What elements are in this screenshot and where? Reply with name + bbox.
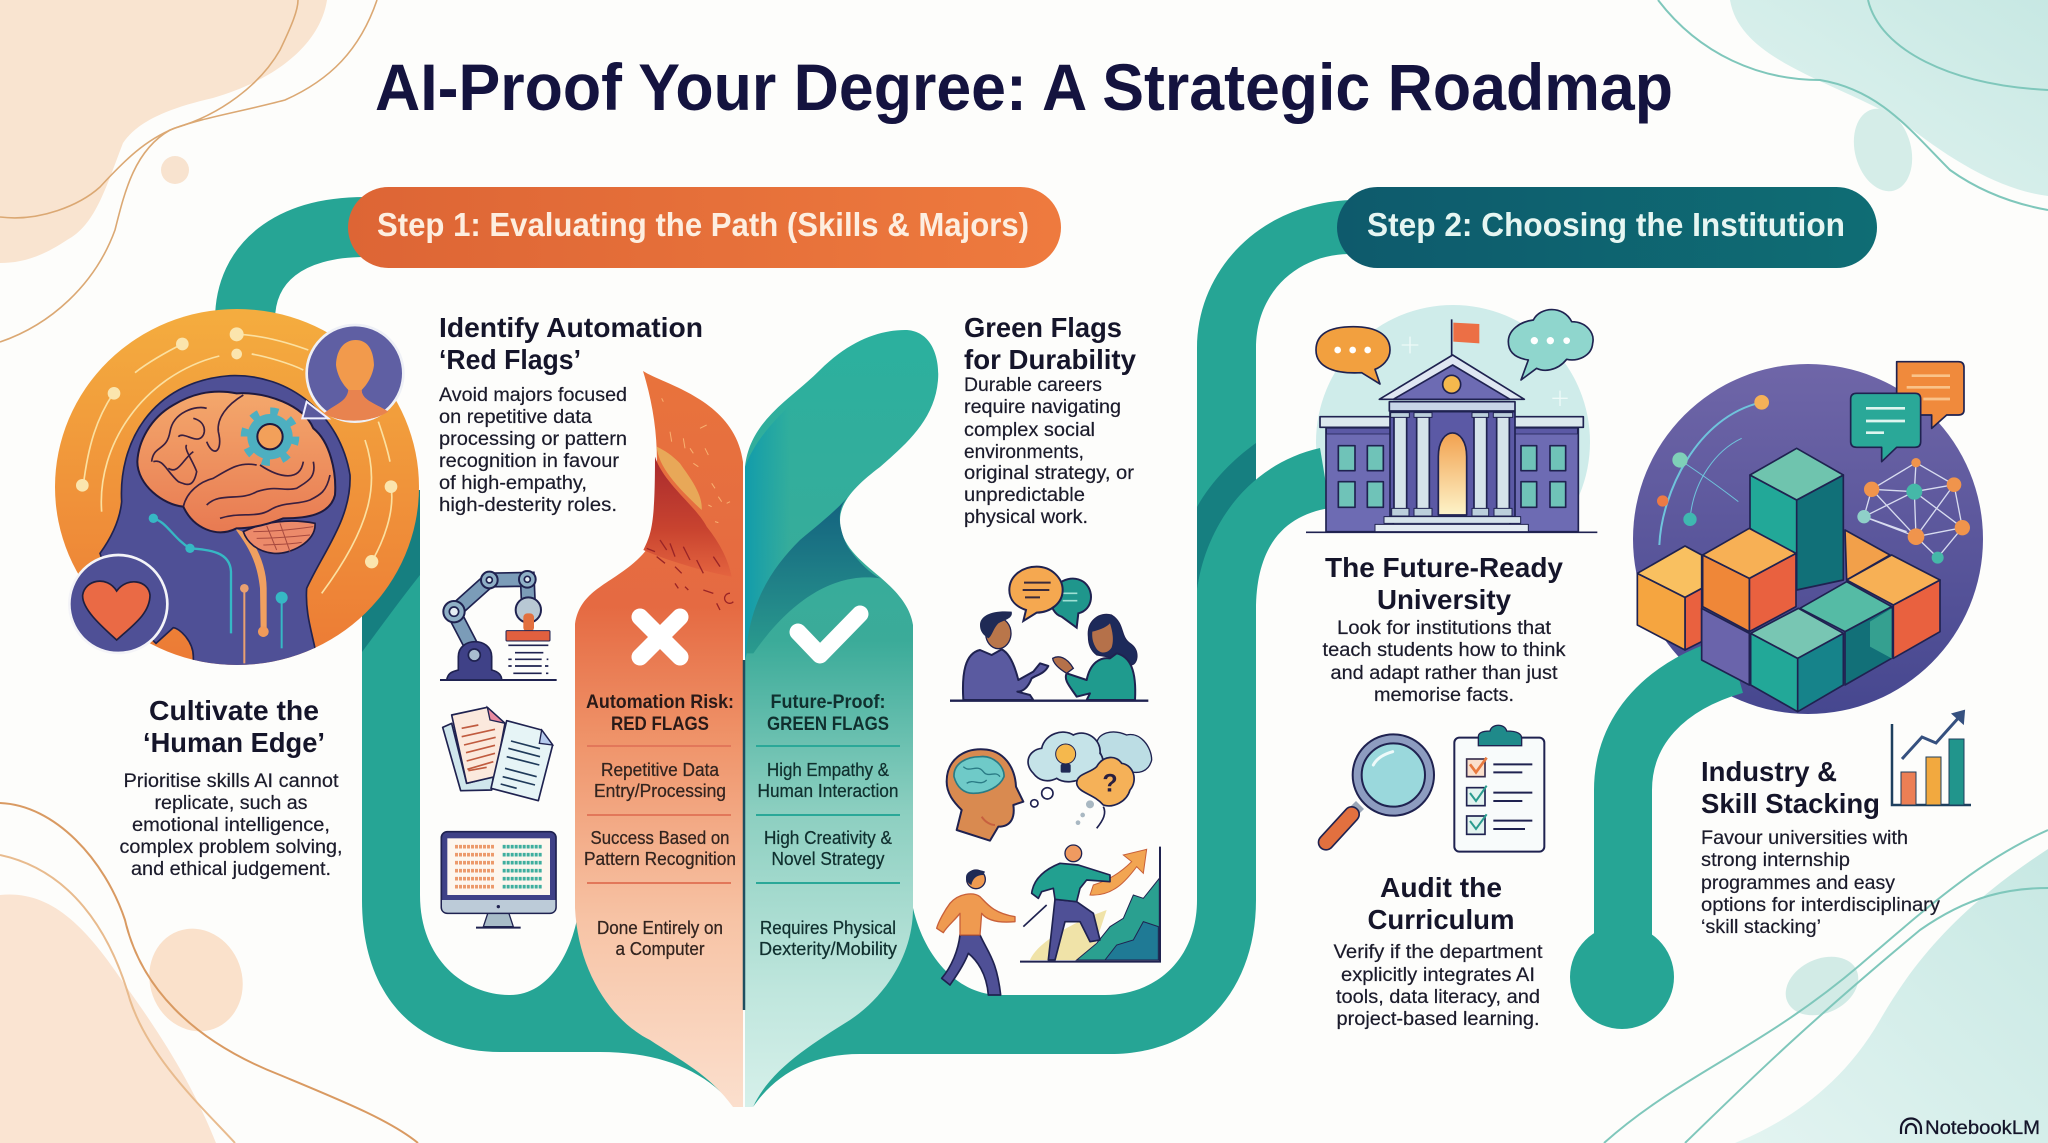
icon: checklist clipboard [1454, 725, 1544, 852]
path ribbon: left loop [362, 490, 735, 1107]
step 1 pill [348, 187, 1061, 268]
text block: the future-ready university: Look for institutions that [1337, 618, 1552, 639]
text block: identify automation red flags: recognition in favour [439, 451, 620, 472]
divider: red and green [743, 660, 745, 1010]
text block: red flags list [584, 692, 736, 959]
path ribbon: stem to skill stacking [1570, 665, 1735, 1029]
title: AI-Proof Your Degree: A Strategic Roadmap [375, 50, 1673, 124]
text block: industry and skill stacking: ‘skill stacking’ [1701, 917, 1821, 938]
text block: green flags for durability [964, 312, 1136, 528]
panel: green flags column [745, 330, 938, 1107]
text block: green flags list: GREEN FLAGS [767, 714, 889, 735]
text block: green flags for durability: environments, [964, 442, 1084, 463]
path ribbon: start into step 1 [245, 227, 365, 320]
text block: green flags for durability: Durable careers [964, 375, 1102, 396]
text block: red flags list: RED FLAGS [611, 714, 709, 735]
text block: cultivate the human edge: Prioritise skills AI cannot [124, 771, 339, 792]
icon: two people talking [950, 567, 1148, 701]
text block: red flags list: Automation Risk: [586, 692, 734, 713]
watermark: NotebookLM: NotebookLM [1925, 1118, 2040, 1139]
text block: green flags list: Requires Physical [760, 918, 896, 938]
icon: magnifying glass [1326, 734, 1434, 842]
panel: red flags column [575, 371, 743, 1107]
text block: audit the curriculum [1334, 872, 1543, 1030]
text block: industry and skill stacking [1701, 756, 1941, 938]
text block: green flags list: Dexterity/Mobility [759, 939, 897, 959]
text block: identify automation red flags: ‘Red Flags’ [439, 344, 581, 375]
text block: industry and skill stacking: Skill Stacking [1701, 788, 1880, 819]
text block: audit the curriculum: Verify if the department [1334, 942, 1543, 963]
text block: identify automation red flags: Identify Automation [439, 312, 703, 343]
text block: green flags list [756, 692, 900, 959]
text block: cultivate the human edge: emotional intelligence, [132, 815, 330, 836]
text block: green flags for durability: complex social [964, 420, 1095, 441]
text block: red flags list: Pattern Recognition [584, 849, 736, 869]
icon: bar chart [1892, 711, 1971, 805]
text block: red flags list: Repetitive Data [601, 760, 720, 780]
path ribbon: branch to university [1197, 448, 1330, 700]
text block: green flags list: Future-Proof: [770, 692, 886, 713]
text block: identify automation red flags: high-desterity roles. [439, 495, 617, 516]
icon: brain and human edge circle [55, 309, 419, 668]
icon: white cross [640, 617, 680, 657]
text block: green flags for durability: physical work. [964, 507, 1088, 528]
skill stacking backdrop circle [1633, 364, 1983, 714]
text block: the future-ready university: teach students how to think [1322, 640, 1566, 661]
text block: the future-ready university: The Future-Ready [1325, 552, 1563, 583]
icon: head with thought clouds [947, 732, 1152, 841]
step 1 pill: Step 1: Evaluating the Path (Skills & Majors) [377, 206, 1029, 243]
icon: walker and climber [937, 845, 1160, 995]
text block: green flags list: High Empathy & [767, 760, 889, 780]
text block: identify automation red flags: Avoid majors focused [439, 385, 627, 406]
university backdrop circle [1316, 305, 1590, 524]
path ribbon shadow: branch overlap [1197, 443, 1256, 590]
text block: the future-ready university [1322, 552, 1566, 706]
icon: white check [798, 614, 860, 655]
text block: cultivate the human edge: and ethical judgement. [131, 859, 331, 880]
text block: red flags list: a Computer [616, 939, 705, 959]
text block: identify automation red flags [439, 312, 703, 516]
text block: identify automation red flags: on repetitive data [439, 407, 592, 428]
text block: cultivate the human edge [120, 695, 342, 880]
text block: green flags for durability: unpredictable [964, 485, 1085, 506]
text block: industry and skill stacking: strong internship [1701, 850, 1850, 871]
text block: identify automation red flags: of high-empathy, [439, 473, 587, 494]
icon: computer monitor [441, 832, 556, 928]
icon: documents [443, 707, 553, 801]
text block: industry and skill stacking: Favour universities with [1701, 828, 1908, 849]
text block: cultivate the human edge: replicate, such as [154, 793, 308, 814]
text block: audit the curriculum: explicitly integrates AI [1341, 965, 1535, 986]
icon: head with thought clouds: ? [1102, 770, 1118, 798]
icon: robot arm [440, 571, 557, 680]
text block: the future-ready university: and adapt rather than just [1330, 663, 1558, 684]
text block: green flags for durability: require navigating [964, 397, 1121, 418]
text block: the future-ready university: University [1377, 584, 1511, 615]
text block: industry and skill stacking: Industry & [1701, 756, 1837, 787]
text block: the future-ready university: memorise facts. [1374, 685, 1514, 706]
text block: green flags for durability: for Durability [964, 344, 1136, 375]
text block: audit the curriculum: Audit the [1380, 872, 1502, 903]
path ribbon: right loop into step 2 [753, 200, 1350, 1107]
step 2 pill [1337, 187, 1877, 268]
text block: cultivate the human edge: Cultivate the [149, 695, 319, 726]
text block: audit the curriculum: tools, data literacy, and [1336, 987, 1540, 1008]
text block: industry and skill stacking: programmes and easy [1701, 873, 1896, 894]
text block: green flags list: Novel Strategy [772, 849, 884, 869]
icon: skill stacking cubes [1637, 362, 1970, 712]
text block: audit the curriculum: project-based learning. [1336, 1009, 1540, 1030]
text block: industry and skill stacking: options for interdisciplinary [1701, 895, 1941, 916]
icon: university building [1306, 310, 1597, 532]
text block: green flags for durability: Green Flags [964, 312, 1122, 343]
text block: cultivate the human edge: complex problem solving, [120, 837, 342, 858]
text block: green flags list: Human Interaction [758, 781, 898, 801]
text block: identify automation red flags: processing or pattern [439, 429, 627, 450]
text block: green flags for durability: original strategy, or [964, 463, 1135, 484]
text block: red flags list: Entry/Processing [594, 781, 726, 801]
text block: audit the curriculum: Curriculum [1368, 904, 1514, 935]
step 2 pill: Step 2: Choosing the Institution [1367, 206, 1845, 243]
text block: cultivate the human edge: ‘Human Edge’ [143, 727, 325, 758]
text block: green flags list: High Creativity & [764, 828, 892, 848]
text block: red flags list: Success Based on [590, 828, 730, 848]
text block: red flags list: Done Entirely on [597, 918, 723, 938]
